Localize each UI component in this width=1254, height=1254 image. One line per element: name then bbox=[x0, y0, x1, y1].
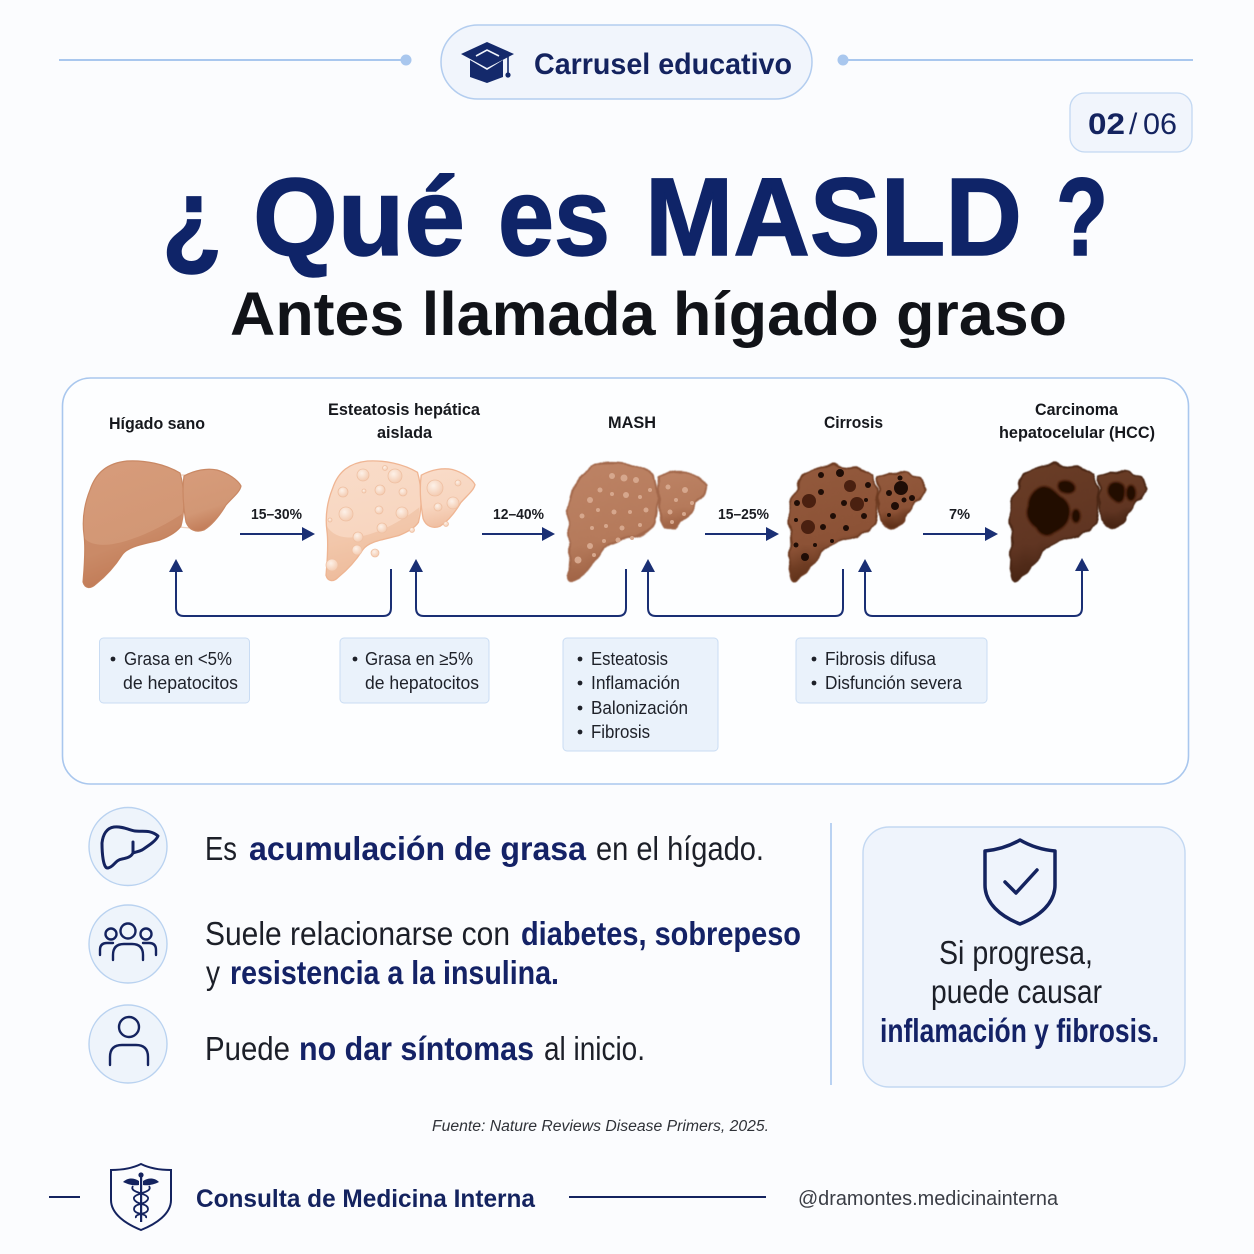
title: Qué bbox=[253, 156, 465, 279]
arrow: 15–25% bbox=[705, 506, 779, 541]
text: fat accumulation bbox=[205, 830, 764, 867]
icon: caduceus shield bbox=[111, 1164, 171, 1230]
subtitle: Antes llamada hígado graso bbox=[230, 280, 1067, 348]
text: no symptoms bbox=[205, 1030, 645, 1067]
header line left bbox=[59, 54, 412, 66]
title bbox=[162, 156, 1108, 279]
stage labels: Cirrosis bbox=[824, 413, 883, 432]
arrow: 15–30% bbox=[240, 506, 315, 541]
text: fat accumulation: en el hígado. bbox=[596, 830, 764, 867]
arrow: 12–40%: 12–40% bbox=[493, 506, 544, 523]
liver: steatosis bbox=[326, 461, 475, 581]
icon: person in circle bbox=[89, 1005, 167, 1083]
arrow: 15–25%: 15–25% bbox=[718, 506, 769, 523]
arrow: 12–40% bbox=[482, 506, 555, 541]
page counter 02/06: 02 bbox=[1088, 108, 1125, 141]
icon: people in circle bbox=[89, 905, 167, 983]
callout text: inflamación y fibrosis. bbox=[880, 1012, 1159, 1049]
note: healthy liver bbox=[100, 638, 250, 703]
title: ? bbox=[1056, 156, 1108, 279]
page counter 02/06: 06 bbox=[1143, 108, 1177, 141]
note: MASH: Esteatosis bbox=[591, 649, 668, 669]
title: ¿ bbox=[162, 156, 222, 279]
liver: MASH bbox=[568, 463, 708, 581]
header pill: Carrusel educativo bbox=[441, 25, 812, 99]
return arrows bbox=[169, 558, 1089, 616]
callout: progression bbox=[863, 827, 1185, 1087]
arrow: 7%: 7% bbox=[949, 506, 970, 523]
note: steatosis: de hepatocitos bbox=[365, 673, 479, 693]
stage labels: hepatocelular (HCC) bbox=[999, 423, 1155, 442]
stage labels: aislada bbox=[377, 423, 433, 442]
note: cirrhosis: Disfunción severa bbox=[825, 673, 963, 693]
divider bbox=[830, 823, 832, 1085]
page counter 02/06: / bbox=[1129, 108, 1138, 141]
text: no symptoms: al inicio. bbox=[544, 1030, 645, 1067]
stage labels: Esteatosis hepática bbox=[328, 400, 481, 419]
note: steatosis bbox=[340, 638, 489, 703]
text: associated conditions: Suele relacionarse con bbox=[205, 915, 510, 952]
callout text: Si progresa, bbox=[939, 934, 1093, 971]
text: associated conditions: diabetes, sobrepeso bbox=[521, 915, 801, 952]
note: MASH bbox=[563, 638, 718, 751]
title: MASLD bbox=[645, 156, 1022, 279]
liver: hepatocellular carcinoma bbox=[1010, 464, 1148, 580]
note: healthy liver: Grasa en <5% bbox=[124, 649, 232, 669]
text: associated conditions bbox=[205, 915, 801, 991]
note: healthy liver: de hepatocitos bbox=[123, 673, 238, 693]
source note: Fuente: Nature Reviews Disease Primers, 2025. bbox=[432, 1118, 769, 1135]
icon: graduation cap bbox=[461, 42, 514, 83]
liver: healthy bbox=[83, 461, 241, 588]
stage labels: Carcinoma bbox=[1035, 400, 1119, 419]
header line right bbox=[838, 54, 1193, 66]
callout text: puede causar bbox=[931, 973, 1102, 1010]
footer handle: @dramontes.medicinainterna bbox=[798, 1188, 1059, 1210]
page counter 02/06 bbox=[1070, 93, 1192, 152]
stage labels: MASH bbox=[608, 413, 656, 432]
text: no symptoms: no dar síntomas bbox=[299, 1030, 534, 1067]
title: es bbox=[498, 156, 610, 279]
text: no symptoms: Puede bbox=[205, 1030, 290, 1067]
arrow: 15–30%: 15–30% bbox=[251, 506, 302, 523]
note: cirrhosis: Fibrosis difusa bbox=[825, 649, 937, 669]
note: MASH: Balonización bbox=[591, 698, 688, 718]
footer line middle bbox=[569, 1196, 766, 1198]
note: cirrhosis bbox=[796, 638, 987, 703]
note: MASH: Inflamación bbox=[591, 673, 680, 693]
callout text bbox=[880, 934, 1159, 1049]
icon: shield check bbox=[985, 840, 1055, 924]
text: associated conditions: resistencia a la insulina. bbox=[230, 954, 559, 991]
note: MASH: Fibrosis bbox=[591, 722, 650, 742]
footer line left bbox=[49, 1196, 80, 1198]
icon: liver in circle bbox=[89, 808, 167, 886]
stage labels bbox=[109, 400, 1155, 442]
text: fat accumulation: Es bbox=[205, 830, 237, 867]
note: steatosis: Grasa en ≥5% bbox=[365, 649, 473, 669]
panel: liver disease progression bbox=[62, 378, 1188, 784]
pill label: Carrusel educativo bbox=[534, 48, 792, 81]
arrow: 7% bbox=[923, 506, 998, 541]
text: fat accumulation: acumulación de grasa bbox=[249, 830, 587, 867]
liver: cirrhosis bbox=[789, 465, 927, 581]
text: associated conditions: y bbox=[206, 954, 220, 991]
stage labels: Hígado sano bbox=[109, 414, 205, 433]
footer name: Consulta de Medicina Interna bbox=[196, 1185, 536, 1213]
